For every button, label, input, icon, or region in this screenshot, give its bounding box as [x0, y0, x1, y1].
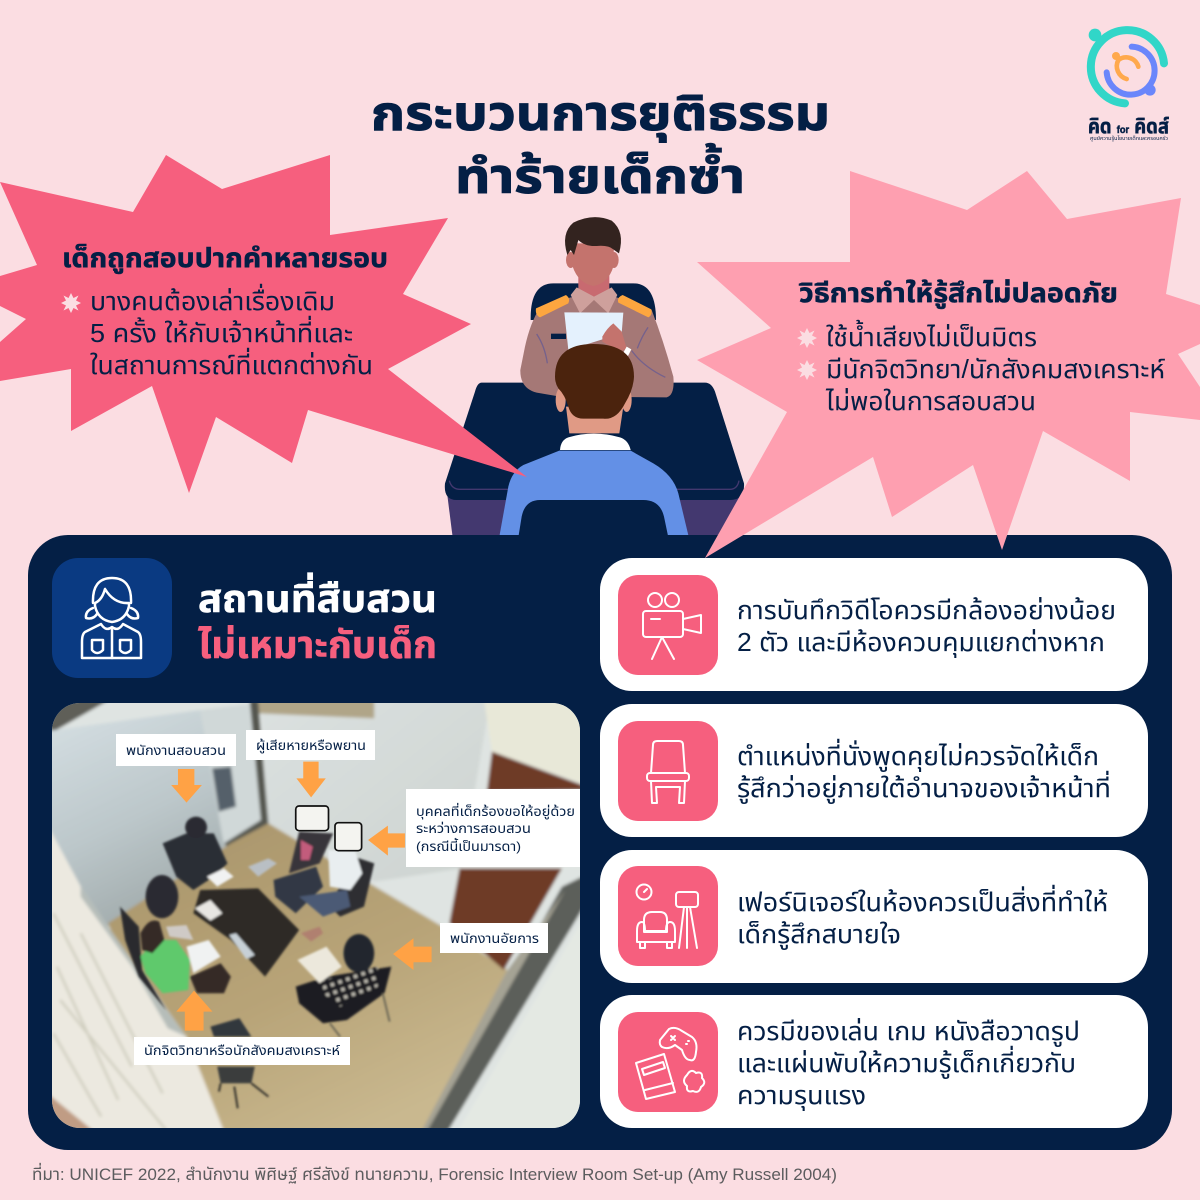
left burst bullet: บางคนต้องเล่าเรื่องเดิม — [90, 283, 335, 316]
label: investigator — [116, 734, 236, 766]
card: toys and books: ควรมีของเล่น เกม หนังสือวาดรูป — [737, 1016, 1080, 1047]
logo: คิด for คิดส์ — [1088, 116, 1169, 138]
card: toys and books: ความรุนแรง — [737, 1080, 866, 1111]
logo: ศูนย์ความรู้นโยบายเด็กและครอบครัว — [1090, 135, 1168, 142]
right burst bullets: ใช้น้ำเสียงไม่เป็นมิตร — [826, 319, 1037, 352]
card: seating position: ตำแหน่งที่นั่งพูดคุยไม่ควรจัดให้เด็ก — [737, 738, 1099, 772]
panel heading: สถานที่สืบสวน — [198, 572, 437, 621]
right burst bullets: มีนักจิตวิทยา/นักสังคมสงเคราะห์ — [826, 354, 1166, 384]
officer head and hair — [565, 217, 621, 297]
label: prosecutor — [440, 923, 548, 953]
label: investigator: พนักงานสอบสวน — [126, 743, 226, 758]
left burst heading: เด็กถูกสอบปากคำหลายรอบ — [62, 243, 388, 274]
card: furniture: เฟอร์นิเจอร์ในห้องควรเป็นสิ่งที่ทำให้ — [737, 884, 1108, 917]
photo of interview room — [43, 693, 596, 1143]
card: furniture: เด็กรู้สึกสบายใจ — [737, 919, 901, 950]
icon: chair — [647, 741, 689, 803]
title: กระบวนการยุติธรรม — [371, 88, 830, 143]
card: toys and books: และแผ่นพับให้ความรู้เด็กเกี่ยวกับ — [737, 1045, 1076, 1079]
orange arrows — [171, 762, 432, 1031]
card: video recording: การบันทึกวิดีโอควรมีกล้องอย่างน้อย — [737, 595, 1116, 625]
label: requested person: บุคคลที่เด็กร้องขอให้อยู่ด้วย — [416, 802, 575, 819]
label: requested person — [406, 789, 580, 867]
right burst bullets — [797, 319, 1166, 416]
privacy boxes covering faces — [296, 806, 362, 851]
label: requested person: (กรณีนี้เป็นมารดา) — [416, 837, 521, 854]
icon: video camera — [643, 593, 701, 659]
card: seating position — [600, 704, 1148, 837]
panel: main navy — [28, 535, 1172, 1150]
officer chair back — [531, 283, 656, 320]
speech burst: right — [697, 171, 1200, 558]
label: psychologist or social worker — [134, 1037, 350, 1065]
card: toys and books — [600, 995, 1148, 1128]
left burst bullet: ในสถานการณ์ที่แตกต่างกัน — [90, 347, 373, 380]
label: victim or witness — [246, 730, 375, 760]
child from behind — [499, 344, 689, 537]
panel heading — [198, 572, 437, 667]
speech burst: left — [0, 155, 527, 493]
icon: child — [52, 558, 172, 678]
title: ทำร้ายเด็กซ้ำ — [455, 143, 745, 204]
label: requested person: ระหว่างการสอบสวน — [416, 821, 531, 836]
logo — [1088, 29, 1169, 142]
illustration: officer questioning a child across a desk — [445, 217, 744, 537]
card: seating position: รู้สึกว่าอยู่ภายใต้อำนาจของเจ้าหน้าที่ — [737, 770, 1111, 804]
right burst bullets: ไม่พอในการสอบสวน — [825, 386, 1036, 416]
card: video recording: 2 ตัว และมีห้องควบคุมแยกต่างหาก — [737, 627, 1105, 658]
label: victim or witness: ผู้เสียหายหรือพยาน — [256, 738, 366, 753]
source: ที่มา: UNICEF 2022, สำนักงาน พิศิษฐ์ ศรีสังข์ ทนายความ, Forensic Interview Room Set-up (Amy Russell 2004) — [32, 1162, 837, 1184]
card: furniture — [600, 850, 1148, 983]
card: video recording — [600, 558, 1148, 691]
desk — [445, 383, 744, 537]
left burst bullet — [61, 283, 373, 380]
icon: armchair, clock and lamp — [636, 884, 698, 948]
label: psychologist or social worker: นักจิตวิทยาหรือนักสังคมสงเคราะห์ — [144, 1043, 340, 1058]
right burst heading: วิธีการทำให้รู้สึกไม่ปลอดภัย — [798, 278, 1118, 309]
officer uniform — [520, 287, 674, 397]
icon: game controller, book and puzzle — [636, 1028, 704, 1099]
label: prosecutor: พนักงานอัยการ — [450, 931, 539, 946]
panel heading: ไม่เหมาะกับเด็ก — [198, 625, 437, 667]
title — [371, 88, 830, 204]
left burst bullet: 5 ครั้ง ให้กับเจ้าหน้าที่และ — [90, 315, 353, 348]
